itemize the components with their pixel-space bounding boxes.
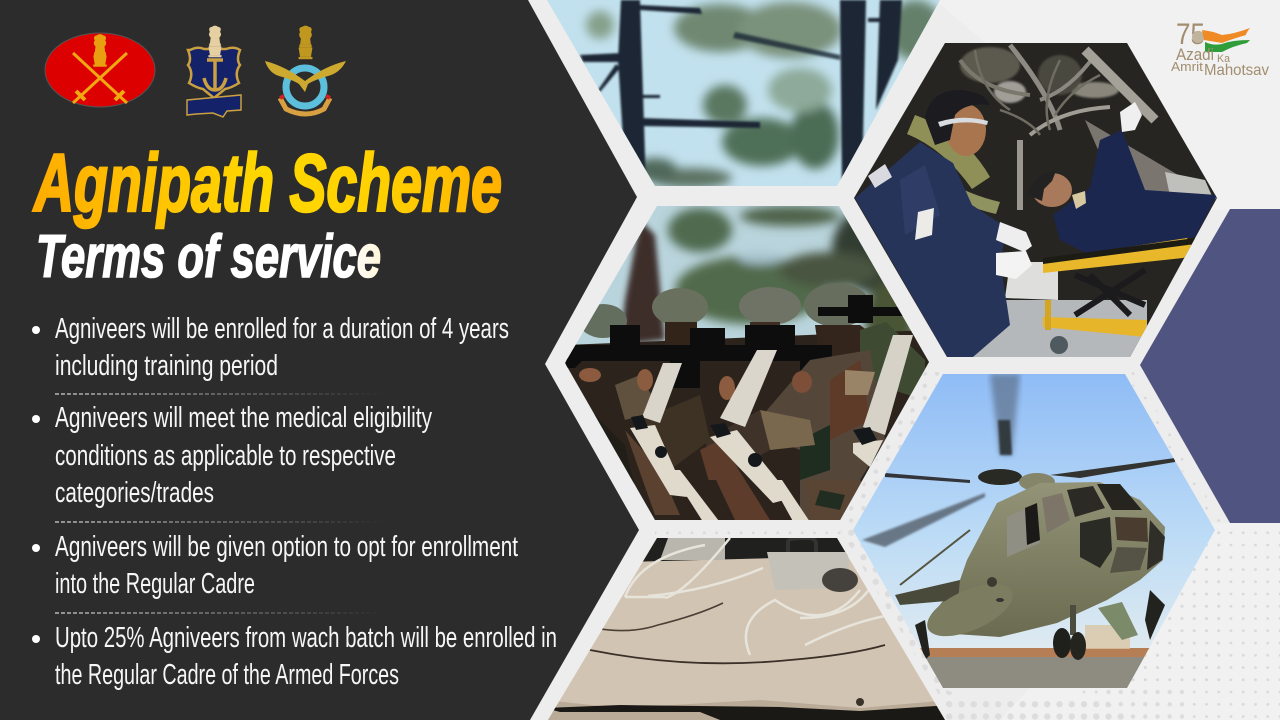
term 2: categories/trades (55, 477, 214, 509)
term 2 (32, 402, 432, 509)
term 1 (32, 313, 509, 382)
white rifle stands (630, 335, 913, 525)
rifles (566, 295, 903, 388)
yellow scissor lift (1043, 238, 1195, 354)
subtitle: Terms of service: Terms of service (36, 223, 381, 290)
term 3: into the Regular Cadre (55, 568, 255, 600)
photo: technicians servicing an aircraft engine (850, 40, 1220, 360)
emblem: Indian Army (45, 33, 155, 107)
title: Agnipath Scheme: Agnipath Scheme (33, 138, 502, 229)
reclining technician (1028, 102, 1217, 255)
logo: Azadi Ka Amrit Mahotsav: Mahotsav (1204, 62, 1269, 79)
term 1: including training period (55, 350, 278, 382)
fuselage (930, 482, 1165, 637)
seated technician (855, 90, 1032, 357)
photo: soldiers with rifles (560, 200, 935, 525)
landing gear (915, 590, 1165, 660)
logo: Azadi Ka Amrit Mahotsav: Amrit (1171, 59, 1203, 74)
photo: pine trees and sky (540, 0, 943, 190)
flag swooshes (1192, 28, 1250, 52)
term 4: the Regular Cadre of the Armed Forces (55, 659, 399, 691)
camouflage uniforms (575, 350, 885, 525)
emblem: Indian Navy (187, 26, 241, 117)
engine parts (907, 44, 1216, 214)
numeral 75: 75 (1176, 18, 1205, 51)
term 2: Agniveers will meet the medical eligibility (55, 402, 432, 434)
logo wordmark: Azadi (1176, 45, 1214, 64)
dark text panel (0, 0, 639, 720)
term 1: Agniveers will be enrolled for a duration of 4 years (55, 313, 509, 345)
emblem: Indian Air Force (265, 26, 346, 114)
helmets (579, 283, 925, 400)
rotor blades (862, 374, 1175, 547)
photo: army helicopter on the apron (850, 370, 1220, 692)
logo: Azadi Ka Amrit Mahotsav (1171, 18, 1269, 79)
term 4 (32, 622, 557, 691)
logo: Azadi Ka Amrit Mahotsav: Ka (1217, 53, 1231, 65)
term 3: Agniveers will be given option to opt for enrollment (55, 531, 518, 563)
term 3 (32, 531, 518, 600)
ground (920, 625, 1150, 688)
term 4: Upto 25% Agniveers from wach batch will be enrolled in (55, 622, 557, 654)
term 2: conditions as applicable to respective (55, 440, 396, 472)
accent shape: slate blue hexagon (1140, 209, 1280, 523)
photo: cables on canvas tarp (545, 538, 950, 720)
stand knobs (631, 415, 877, 467)
dotted texture (655, 372, 1280, 720)
background facets (935, 0, 1280, 720)
cockpit windows (1007, 484, 1165, 573)
